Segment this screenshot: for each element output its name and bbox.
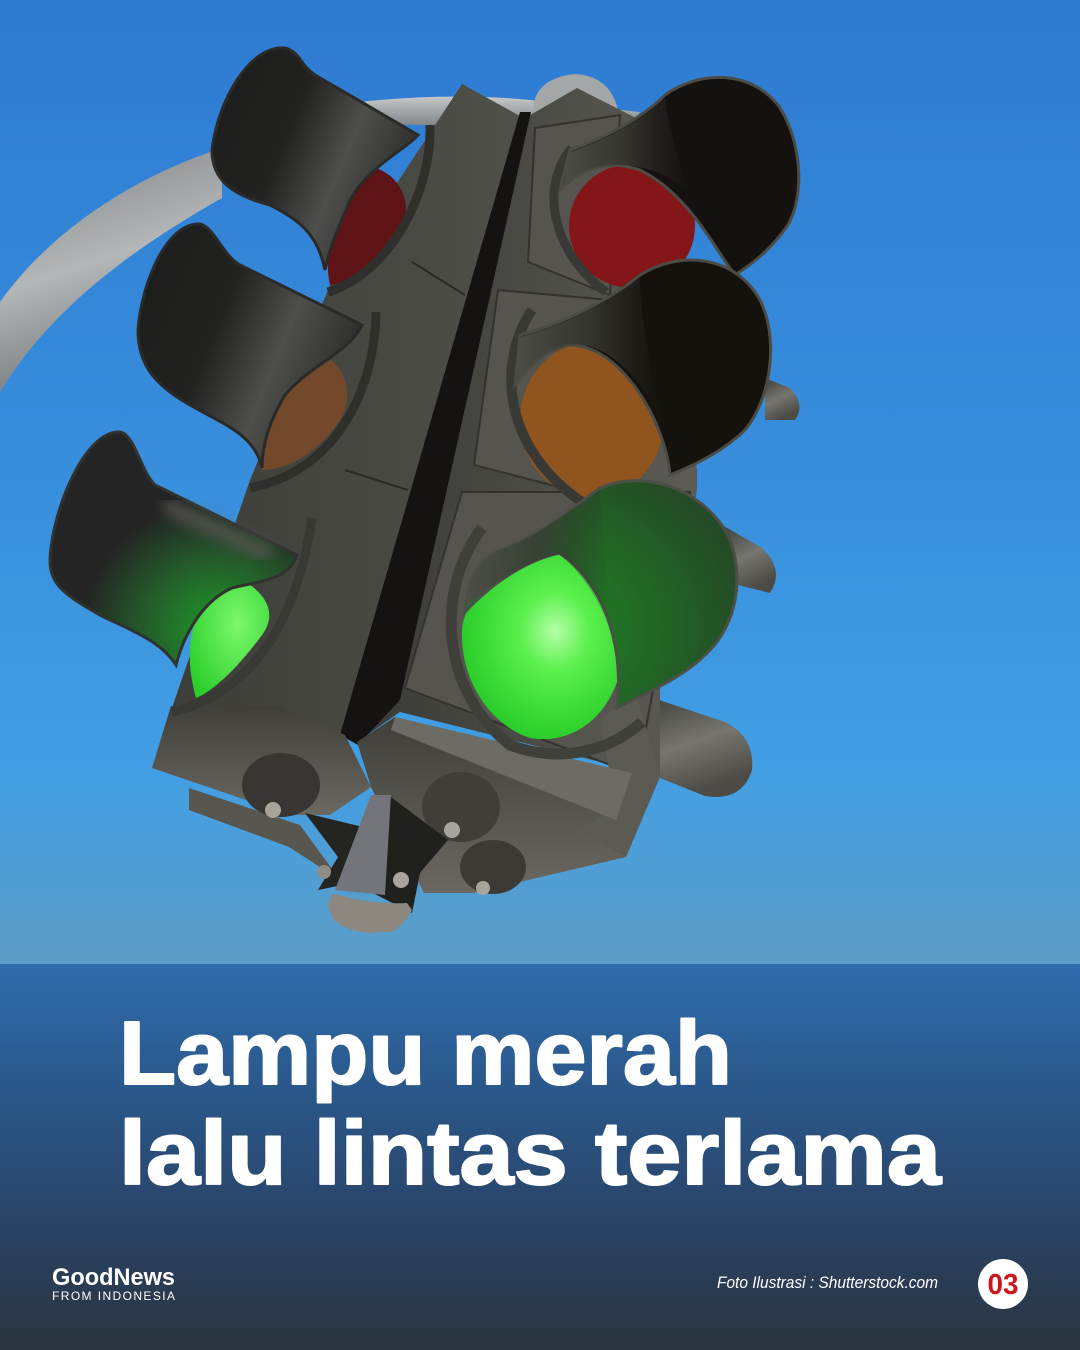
- underside caps: [242, 753, 320, 817]
- bolts: [265, 802, 281, 818]
- underside right: [357, 717, 626, 893]
- logo: GoodNews from Indonesia: [52, 1264, 175, 1303]
- visor: bottom left: [50, 432, 297, 665]
- visor: middle right: [515, 260, 771, 475]
- light strip of right box: [391, 717, 632, 820]
- right side of lower box: [577, 693, 660, 857]
- visor: top left: [212, 48, 418, 270]
- right door panels: [405, 115, 690, 773]
- logo: GoodNews from Indonesia: FROM INDONESIA: [52, 1289, 175, 1303]
- top left signal: red lens: [328, 125, 430, 292]
- right face: [360, 88, 697, 777]
- page number badge: 03: [988, 1269, 1018, 1301]
- title: Lampu merah: [119, 1004, 732, 1104]
- visor: middle left: [138, 224, 362, 468]
- bottom title panel: [0, 964, 1080, 1350]
- visor: top right: [560, 77, 799, 275]
- left face: [172, 84, 520, 740]
- panel seams: [345, 262, 465, 490]
- title: [119, 1004, 942, 1204]
- traffic light housing: [152, 84, 697, 933]
- page number badge: [978, 1259, 1028, 1309]
- title: lalu lintas terlama: [119, 1104, 942, 1204]
- bottom left signal: green lens: [172, 518, 312, 712]
- lower rear box lip: [189, 788, 340, 880]
- curved support pole: [0, 74, 640, 392]
- underside left: [152, 705, 371, 815]
- centre channel: [340, 112, 531, 745]
- bottom pipe: [335, 795, 391, 895]
- logo: GoodNews from Indonesia: GoodNews: [52, 1264, 175, 1291]
- bottom right signal: green lens: [451, 528, 642, 754]
- middle right signal: amber lens: [511, 310, 664, 502]
- visor: bottom right: [465, 481, 737, 708]
- background: blue sky: [0, 0, 1080, 964]
- rear mounting stubs: [640, 378, 799, 797]
- middle left signal: amber lens: [250, 312, 376, 488]
- photo credit: Foto Ilustrasi : Shutterstock.com: [717, 1273, 938, 1292]
- clamps: [305, 813, 363, 890]
- top right signal: red lens: [554, 148, 695, 292]
